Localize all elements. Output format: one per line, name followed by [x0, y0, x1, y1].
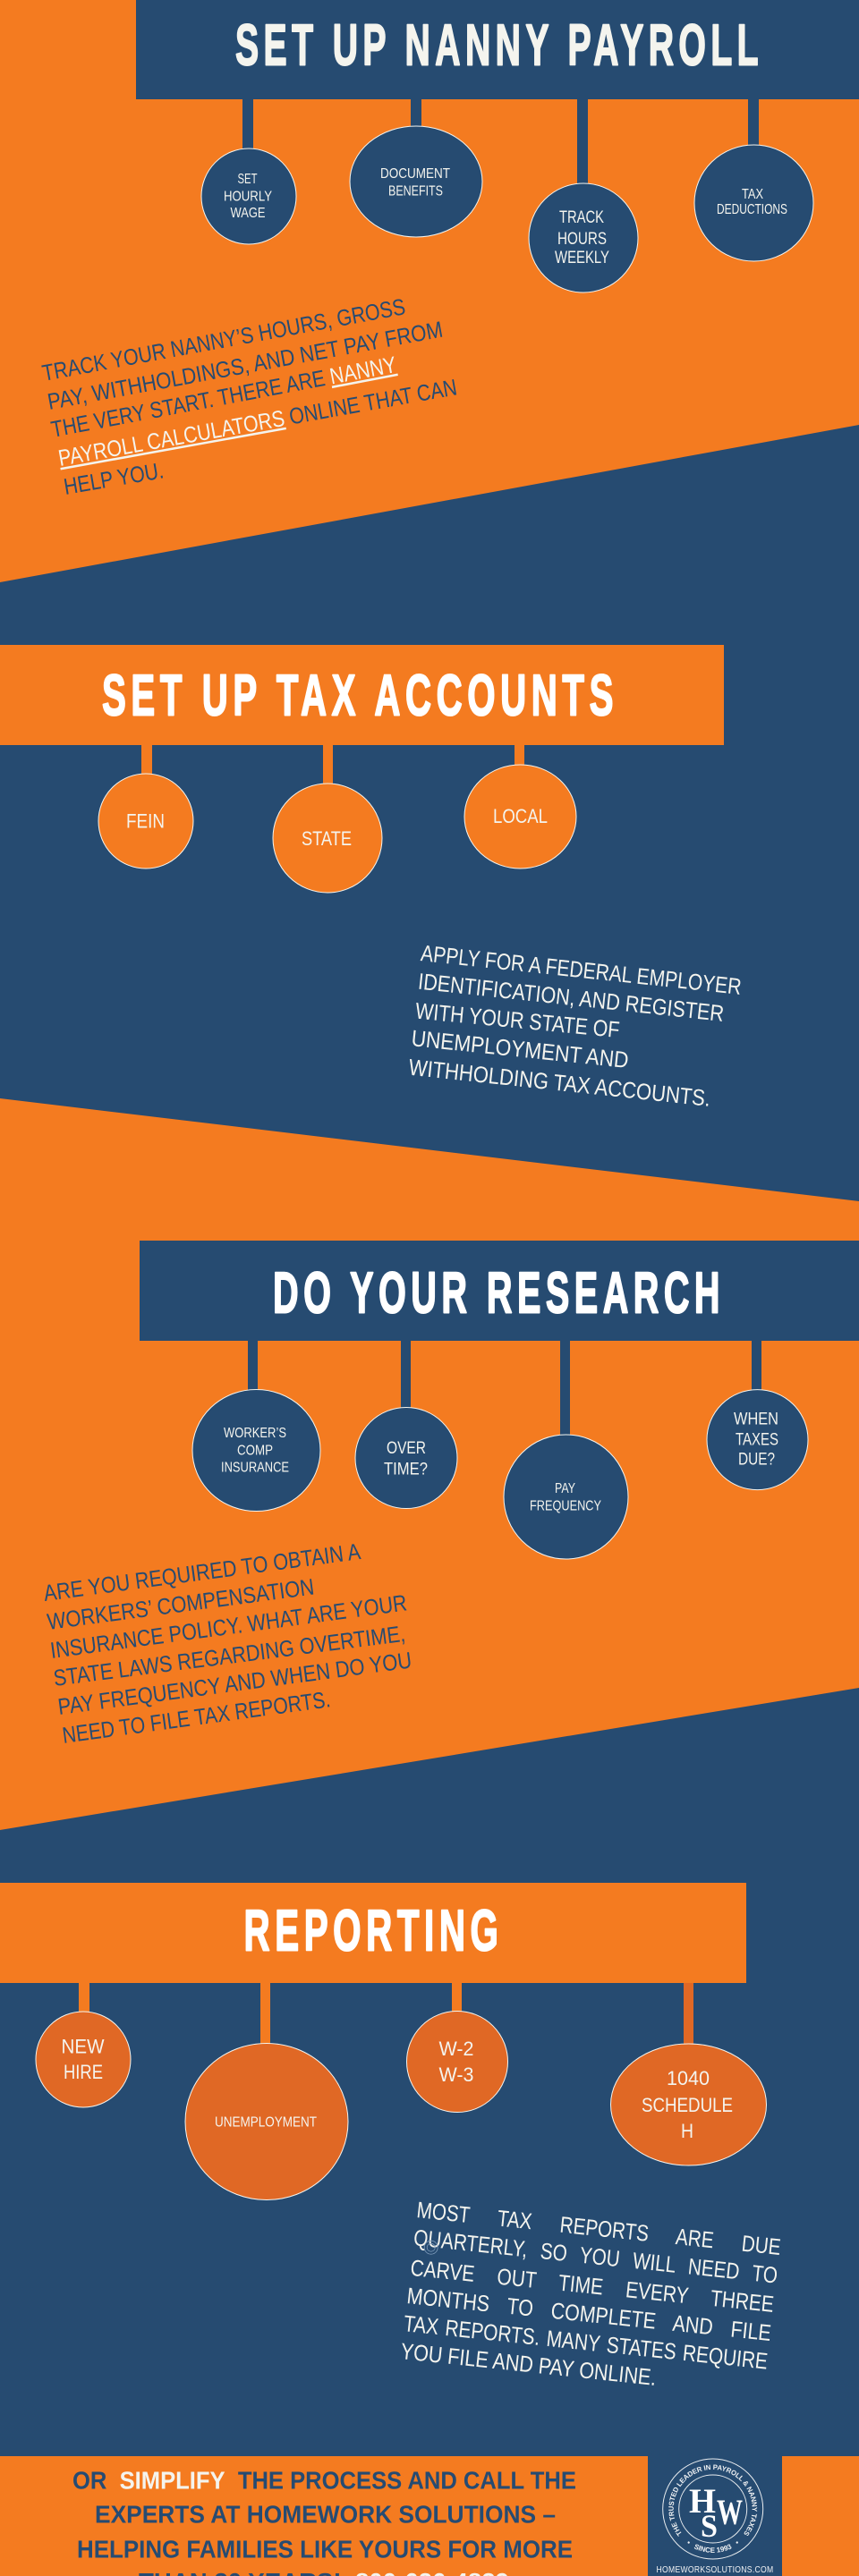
text block: track your nanny's hours: PAY, WITHHOLDINGS, AND NET PAY FROM — [46, 318, 445, 415]
circle: set hourly wage: WAGE — [231, 206, 265, 221]
heading banner: do your research — [140, 1241, 859, 1341]
circle: state: STATE — [302, 827, 352, 850]
circle: over time: OVER — [387, 1438, 426, 1458]
text block: are you required to obtain: INSURANCE POLICY. WHAT ARE YOUR — [49, 1590, 408, 1664]
logo: homework solutions seal: W — [717, 2492, 743, 2532]
call to action text — [72, 2466, 576, 2576]
text block: are you required to obtain: NEED TO FILE TAX REPORTS. — [61, 1687, 332, 1749]
text block: track your nanny's hours: TRACK YOUR NANNY’S HOURS, GROSS — [40, 294, 407, 386]
circle: over time: TIME? — [384, 1460, 428, 1479]
text block: apply for a federal employer identification: IDENTIFICATION, AND REGISTER — [417, 970, 725, 1027]
circle: 1040 schedule h: H — [681, 2120, 693, 2142]
text block: are you required to obtain: ARE YOU REQUIRED TO OBTAIN A — [42, 1539, 362, 1606]
logo: homework solutions seal: THE TRUSTED LEADER IN PAYROLL & NANNY TAXES — [668, 2465, 757, 2537]
text block: apply for a federal employer identification — [407, 941, 743, 1112]
logo: homework solutions seal: S — [701, 2508, 718, 2544]
logo: homework solutions seal: HOMEWORKSOLUTIONS.COM — [657, 2564, 773, 2575]
circle: 1040 schedule h: SCHEDULE — [642, 2094, 733, 2116]
text block: apply for a federal employer identification: APPLY FOR A FEDERAL EMPLOYER — [420, 941, 743, 1000]
call to action text: OR SIMPLIFY THE PROCESS AND CALL THE — [72, 2466, 576, 2494]
circle: fein: FEIN — [126, 810, 165, 832]
circle: set hourly wage: HOURLY — [224, 190, 272, 204]
text block: most tax reports are due quarterly: YOU FILE AND PAY ONLINE. — [399, 2339, 658, 2391]
text block: most tax reports are due quarterly — [399, 2198, 782, 2391]
circle: 1040 schedule h — [610, 1983, 766, 2165]
text block: are you required to obtain: STATE LAWS REGARDING OVERTIME, — [52, 1622, 407, 1691]
text block: most tax reports are due quarterly: QUARTERLY, SO YOU WILL NEED TO — [412, 2225, 778, 2289]
circle: pay frequency: FREQUENCY — [530, 1499, 601, 1514]
circle: tax deductions: DEDUCTIONS — [717, 202, 787, 217]
circle: set hourly wage — [201, 99, 296, 244]
circle: document benefits: BENEFITS — [388, 184, 443, 199]
text block: most tax reports are due quarterly: CARVE OUT TIME EVERY THREE — [409, 2256, 775, 2318]
text block: apply for a federal employer identification: UNEMPLOYMENT AND — [410, 1026, 630, 1073]
circle: 1040 schedule h: 1040 — [667, 2067, 710, 2089]
circle: fein — [98, 745, 193, 869]
text block: most tax reports are due quarterly: MOST TAX REPORTS ARE DUE — [415, 2198, 782, 2260]
heading banner: set up nanny payroll — [136, 0, 859, 99]
circle: state — [273, 745, 382, 893]
heading banner: reporting — [0, 1883, 746, 1983]
call to action text: EXPERTS AT HOMEWORK SOLUTIONS – — [95, 2501, 556, 2529]
circle: track hours weekly: HOURS — [557, 229, 607, 249]
circle: when taxes due: WHEN — [734, 1410, 778, 1429]
text block: are you required to obtain: PAY FREQUENCY AND WHEN DO YOU — [56, 1648, 413, 1720]
text block: apply for a federal employer identification: WITHHOLDING TAX ACCOUNTS. — [407, 1055, 711, 1112]
circle: when taxes due — [707, 1341, 808, 1490]
circle: unemployment: UNEMPLOYMENT — [215, 2114, 317, 2131]
circle: worker's comp insurance: WORKER’S — [224, 1426, 286, 1441]
text block: track your nanny's hours: PAYROLL CALCULATORS ONLINE THAT CAN — [56, 375, 459, 471]
circle: w-2 w-3 — [406, 1983, 508, 2113]
section: set up tax accounts — [0, 645, 743, 1112]
circle: local — [464, 745, 576, 869]
circle: pay frequency — [504, 1341, 628, 1559]
circle: track hours weekly: TRACK — [559, 208, 604, 227]
text block: most tax reports are due quarterly: TAX REPORTS. MANY STATES REQUIRE — [403, 2311, 769, 2375]
circle: document benefits — [350, 99, 482, 237]
circle: new hire — [36, 1983, 131, 2107]
circle: when taxes due: TAXES — [736, 1430, 778, 1450]
section: set up nanny payroll — [40, 0, 859, 500]
footer orange panels — [0, 2456, 859, 2576]
text block: track your nanny's hours: HELP YOU. — [62, 458, 166, 500]
text block: are you required to obtain: WORKERS’ COMPENSATION — [46, 1574, 316, 1635]
heading banner: reporting: REPORTING — [243, 1898, 503, 1962]
circle: document benefits: DOCUMENT — [380, 166, 450, 182]
text block: track your nanny's hours: THE VERY START. THERE ARE NANNY — [49, 352, 398, 443]
circle: pay frequency: PAY — [555, 1481, 575, 1496]
circle: w-2 w-3: W-2 — [438, 2038, 474, 2060]
circle: over time — [355, 1341, 457, 1508]
heading banner: set up tax accounts — [0, 645, 724, 745]
logo: homework solutions seal: • SINCE 1993 • — [687, 2541, 738, 2553]
circle: set hourly wage: SET — [238, 172, 258, 187]
circle: worker's comp insurance: COMP — [237, 1444, 273, 1459]
logo: homework solutions seal: H — [689, 2482, 716, 2521]
footer: call to action and logo — [0, 2456, 859, 2576]
circle: tax deductions — [694, 99, 813, 261]
circle: new hire: NEW — [61, 2036, 105, 2057]
text block: track your nanny's hours — [40, 294, 459, 500]
call to action text: HELPING FAMILIES LIKE YOURS FOR MORE — [77, 2535, 573, 2563]
section: reporting — [0, 1883, 782, 2391]
section: do your research — [42, 1241, 859, 1749]
circle: w-2 w-3: W-3 — [438, 2063, 474, 2086]
circle: unemployment — [185, 1983, 348, 2200]
circle: tax deductions: TAX — [742, 187, 764, 202]
circle: local: LOCAL — [493, 805, 548, 827]
circle: when taxes due: DUE? — [738, 1450, 775, 1470]
circle: worker's comp insurance — [192, 1341, 320, 1512]
text block: apply for a federal employer identification: WITH YOUR STATE OF — [414, 999, 621, 1043]
text block: most tax reports are due quarterly: MONTHS TO COMPLETE AND FILE — [405, 2284, 772, 2346]
circle: new hire: HIRE — [64, 2061, 103, 2083]
circle: worker's comp insurance: INSURANCE — [221, 1460, 289, 1475]
text block: are you required to obtain — [42, 1539, 413, 1749]
circle: track hours weekly — [529, 99, 638, 292]
circle: track hours weekly: WEEKLY — [555, 248, 609, 267]
logo: homework solutions seal — [657, 2458, 773, 2575]
